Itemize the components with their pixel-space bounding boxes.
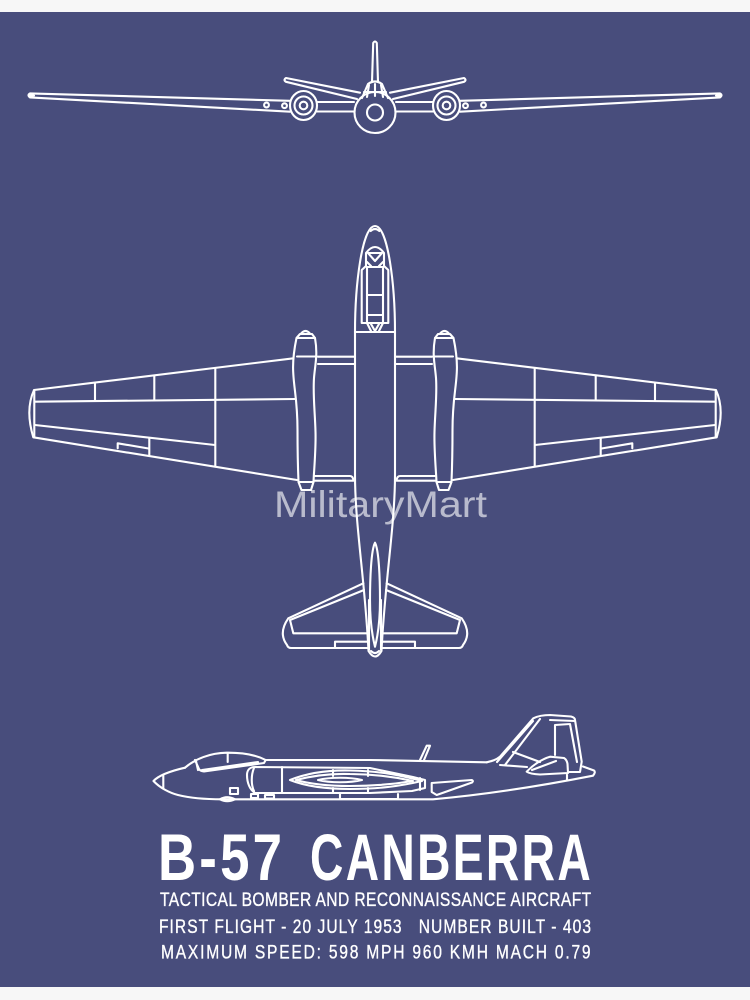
right wing, front view bbox=[390, 78, 722, 120]
tailplane, plan view bbox=[283, 583, 368, 648]
subtitle: TACTICAL BOMBER AND RECONNAISSANCE AIRCRAFT bbox=[160, 888, 591, 910]
fuselage outline bbox=[154, 760, 595, 799]
landing gear hatches bbox=[220, 788, 274, 801]
exhaust fairing bbox=[432, 780, 473, 795]
side view of aircraft bbox=[154, 715, 595, 801]
title: CANBERRA bbox=[310, 821, 591, 895]
left wing, plan view bbox=[29, 331, 355, 490]
watermark: MilitaryMart bbox=[274, 484, 488, 525]
front view of aircraft bbox=[28, 42, 722, 133]
tailplane, right half bbox=[382, 583, 467, 648]
top plan view of aircraft bbox=[29, 226, 721, 656]
first flight and number built: FIRST FLIGHT - 20 JULY 1953 NUMBER BUILT - 403 bbox=[159, 915, 591, 937]
side tailplane bbox=[527, 757, 568, 780]
fuselage plan bbox=[355, 226, 395, 656]
fuselage circle bbox=[354, 92, 396, 133]
cockpit canopy bbox=[163, 753, 266, 788]
tail fin bbox=[487, 715, 582, 772]
fin, plan view bbox=[369, 543, 381, 653]
right wing, plan view bbox=[395, 331, 721, 490]
radio antenna bbox=[420, 746, 430, 760]
title: B-57 bbox=[158, 820, 282, 894]
engine nacelle bbox=[247, 767, 425, 799]
title bbox=[158, 820, 591, 895]
left wing, front view bbox=[28, 78, 360, 120]
left engine nacelle bbox=[293, 331, 317, 490]
tail fin, front view bbox=[362, 42, 388, 98]
maximum speed: MAXIMUM SPEED: 598 MPH 960 KMH MACH 0.79 bbox=[161, 941, 591, 963]
